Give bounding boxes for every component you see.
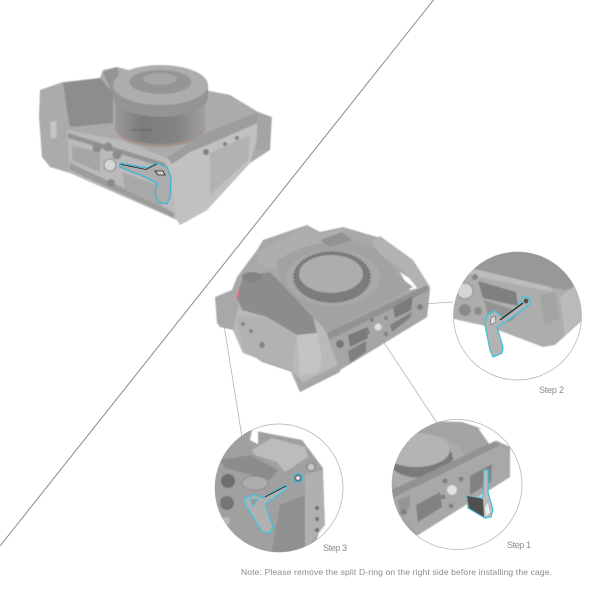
step 1 label: Step 1 <box>507 540 531 550</box>
stored key highlight <box>120 163 171 204</box>
connector lines <box>224 302 453 437</box>
red grip accent <box>237 287 240 300</box>
main camera cage <box>215 225 430 392</box>
lens marking: 3.5-5.6/16-50 <box>131 128 152 132</box>
step 2 detail circle <box>450 250 590 380</box>
installation note: Note: Please remove the split D-ring on the right side before installing the cage. <box>241 567 552 577</box>
step 3 label: Step 3 <box>323 543 347 553</box>
camera with cage and stored key <box>39 65 272 225</box>
step 3 detail circle <box>214 424 344 552</box>
step 2 label: Step 2 <box>539 385 564 395</box>
step 1 detail circle <box>392 419 522 550</box>
diagonal divider <box>0 0 434 546</box>
